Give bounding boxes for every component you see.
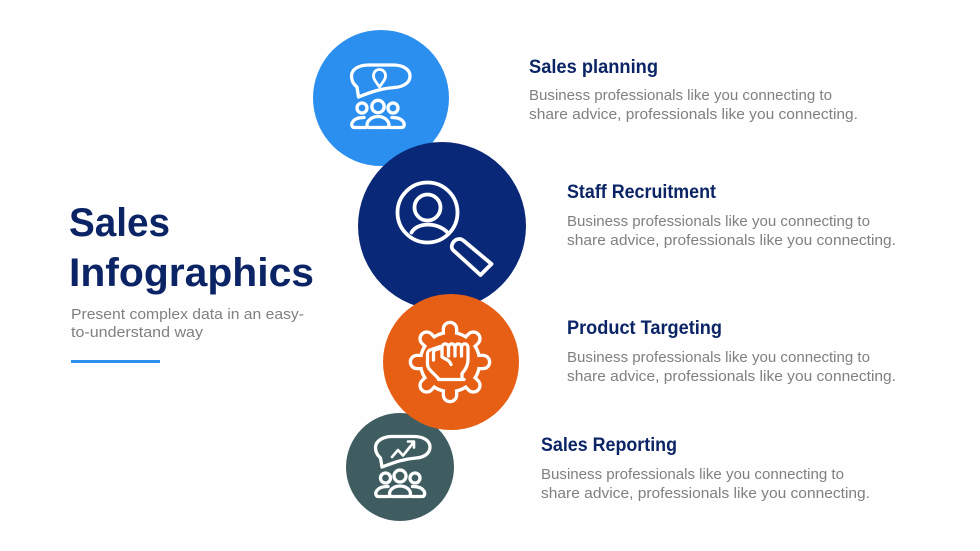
text block: sales reporting: share advice, professionals like you connecting. [541,485,870,502]
accent bar [71,360,160,363]
text block: product targeting [567,318,896,385]
text block: sales planning: Sales planning [529,57,658,78]
icon: magnifier with person [398,182,492,275]
subtitle: Present complex data in an easy- [71,306,304,323]
text block: sales planning: share advice, professionals like you connecting. [529,106,858,123]
title block [69,201,314,363]
title: Infographics [69,251,314,295]
icon: idea bubble with team [352,65,410,128]
subtitle: to-understand way [71,324,204,341]
circle: sales reporting [346,413,454,521]
icon: gear with fist [412,324,488,400]
text block: sales planning: Business professionals like you connecting to [529,87,832,104]
title [69,201,314,295]
title: Sales [69,201,170,245]
text block: staff recruitment: share advice, professionals like you connecting. [567,232,896,249]
circle: sales planning [313,30,449,166]
text block: product targeting: Business professionals like you connecting to [567,349,870,366]
text block: product targeting: Product Targeting [567,318,722,339]
text block: staff recruitment [567,182,896,249]
text block: sales planning [529,57,858,123]
circle: product targeting [383,294,519,430]
circle: staff recruitment [358,142,526,310]
text block: staff recruitment: Staff Recruitment [567,182,717,203]
text block: staff recruitment: Business professionals like you connecting to [567,213,870,230]
text block: sales reporting: Business professionals like you connecting to [541,466,844,483]
subtitle [71,306,304,341]
text block: sales reporting [541,435,870,502]
text block: product targeting: share advice, professionals like you connecting. [567,368,896,385]
text block: sales reporting: Sales Reporting [541,435,677,456]
icon: chart bubble with team [376,436,430,496]
